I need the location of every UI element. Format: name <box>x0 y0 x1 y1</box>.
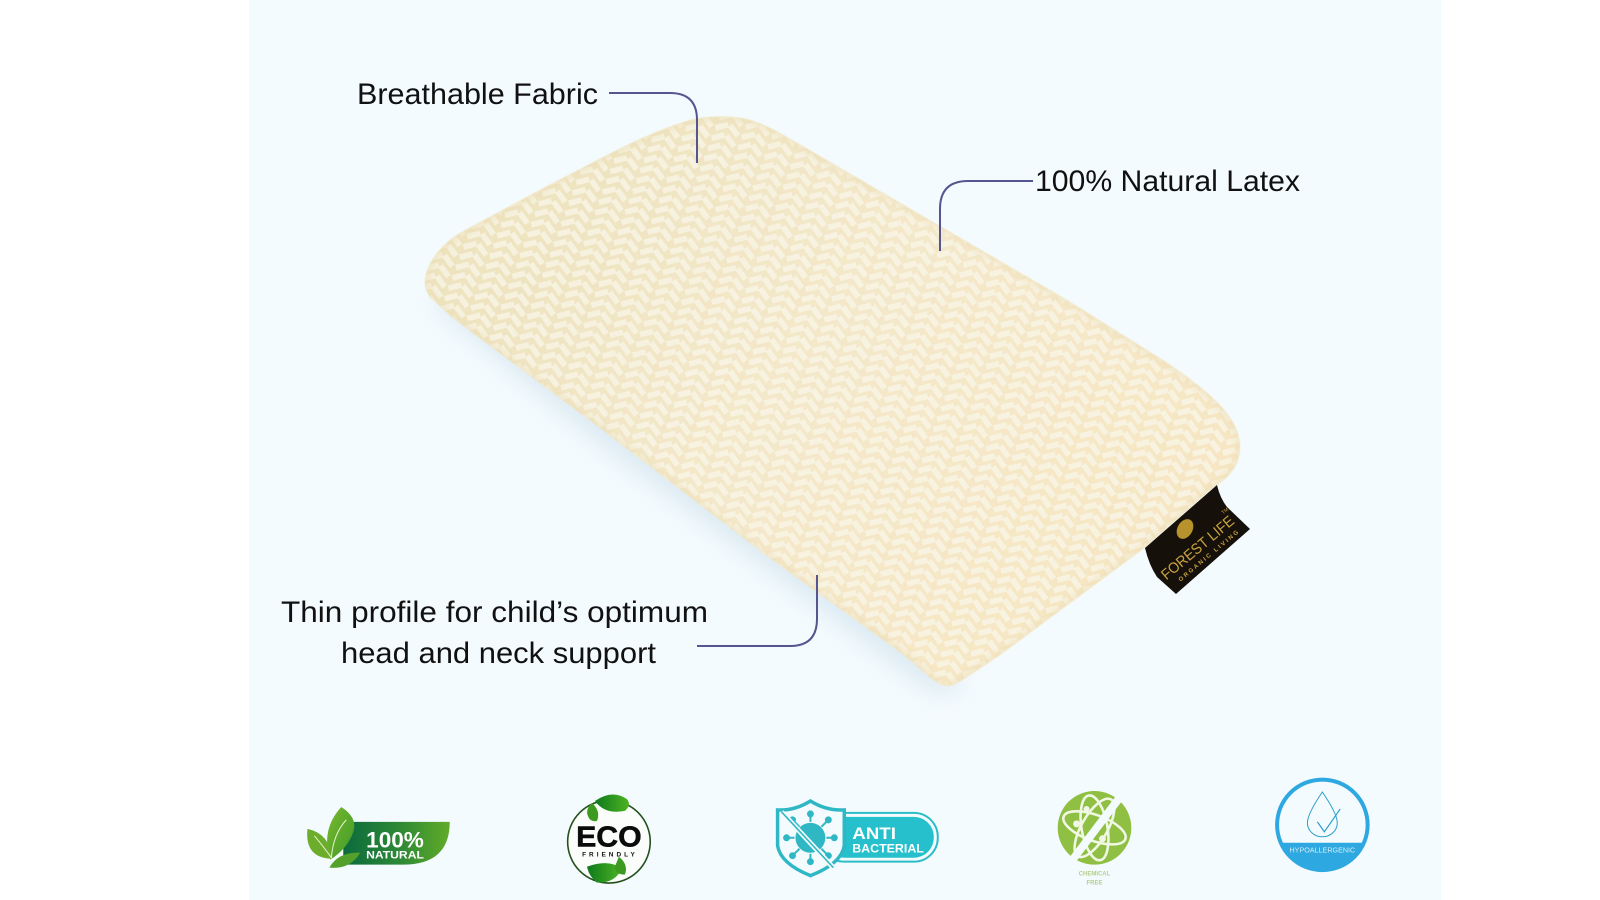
callout: Thin profile <box>281 575 817 670</box>
badge: Anti Bacterial: BACTERIAL <box>852 842 924 856</box>
callout: Thin profile: Thin profile for child’s optimum <box>281 596 708 629</box>
panel: background <box>249 0 1441 900</box>
label tag: Forest Life: TM <box>1221 507 1230 516</box>
callout: Breathable Fabric <box>357 78 697 163</box>
badge: Chemical Free: CHEMICAL <box>1079 872 1111 878</box>
callout: 100% Natural Latex: 100% Natural Latex <box>1035 165 1300 198</box>
callout: Thin profile: head and neck support <box>341 637 657 670</box>
badge: Eco Friendly <box>568 794 650 883</box>
badges row <box>307 778 1369 887</box>
badge: 100% Natural: 100% <box>366 828 424 853</box>
pillow product photo <box>410 100 1260 700</box>
badge: 100% Natural <box>307 807 450 868</box>
badge: Chemical Free <box>1058 791 1131 887</box>
pillow shadow <box>432 290 965 693</box>
badge: Eco Friendly: ECO <box>576 822 642 854</box>
badge: Eco Friendly: FRIENDLY <box>582 852 635 859</box>
badge: Anti Bacterial: ANTI <box>852 824 896 843</box>
badge: Chemical Free: FREE <box>1087 881 1102 887</box>
badge: Anti Bacterial <box>778 801 938 876</box>
callout: Breathable Fabric: Breathable Fabric <box>357 78 598 111</box>
infographic canvas <box>249 0 1441 900</box>
badge: 100% Natural: NATURAL <box>366 850 424 862</box>
callout: 100% Natural Latex <box>940 165 1300 251</box>
badge: Hypoallergenic: HYPOALLERGENIC <box>1290 846 1356 855</box>
label tag: Forest Life: FOREST LIFE <box>1158 513 1238 584</box>
label tag: Forest Life <box>1145 485 1250 594</box>
label tag: Forest Life: ORGANIC LIVING <box>1178 530 1240 583</box>
badge: Hypoallergenic <box>1276 778 1369 872</box>
